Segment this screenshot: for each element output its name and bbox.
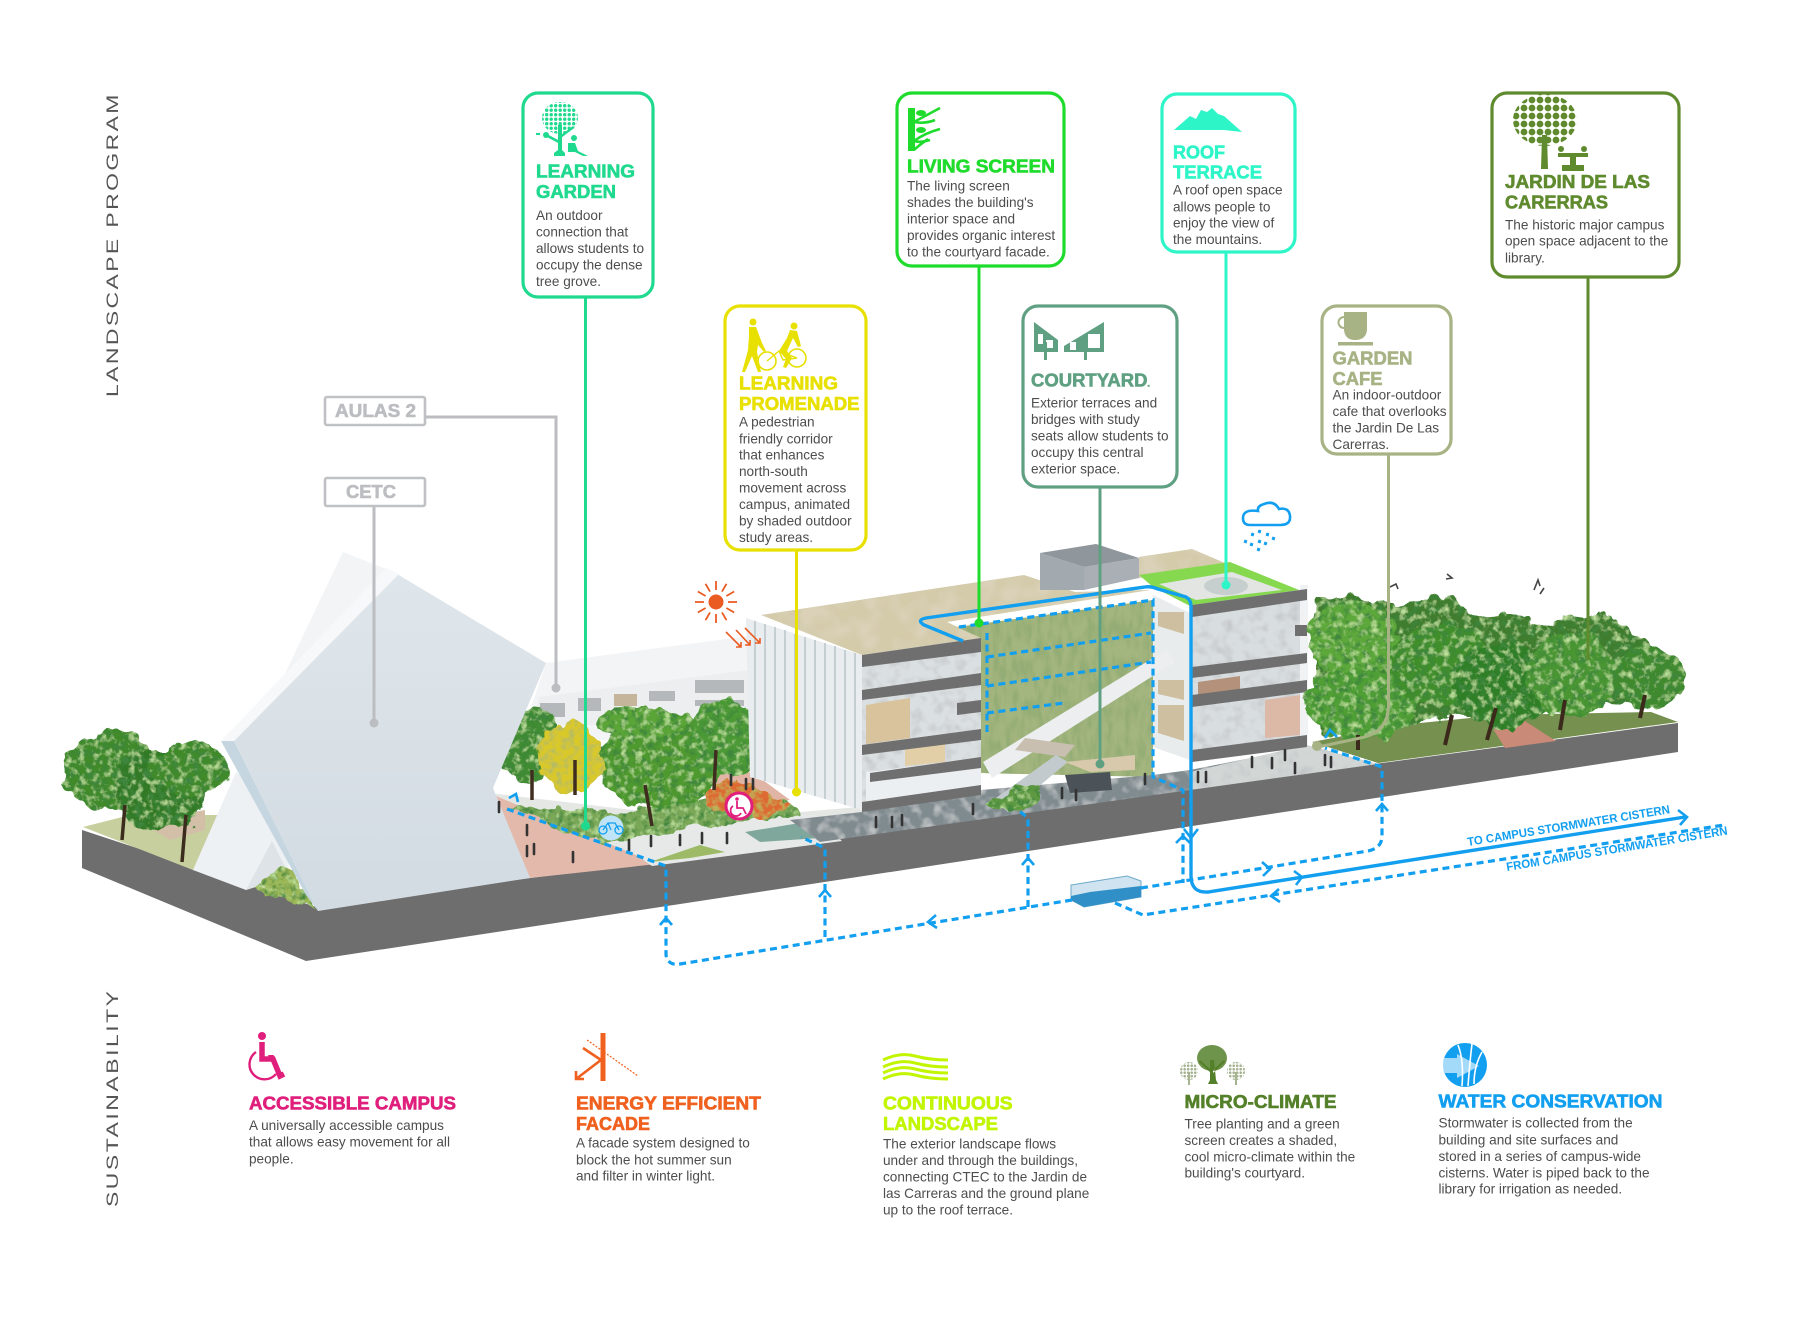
ground under building xyxy=(790,747,1320,842)
callout: learning garden: occupy the dense xyxy=(536,258,643,273)
cistern xyxy=(1071,876,1141,907)
plaza paving: rear xyxy=(700,772,790,802)
callout: learning promenade: that enhances xyxy=(739,448,825,463)
icon: sun rays arrows xyxy=(726,628,760,647)
site ground base xyxy=(489,763,1378,878)
tag: aulas 2: AULAS 2 xyxy=(335,401,416,421)
callout: learning promenade xyxy=(725,306,866,796)
site section diagram xyxy=(62,544,1684,961)
sustainability: energy efficient facade: A facade system designed to xyxy=(576,1136,750,1151)
callout: garden cafe: Carerras. xyxy=(1332,437,1389,452)
stair landing xyxy=(1015,738,1075,757)
sustainability: accessible campus xyxy=(249,1032,456,1166)
callout: roof terrace: TERRACE xyxy=(1173,163,1262,183)
courtyard north wing xyxy=(1153,595,1190,760)
courtyard planter xyxy=(989,787,1040,812)
sustainability: continuous landscape: CONTINUOUS xyxy=(883,1093,1013,1113)
callout: courtyard: Exterior terraces and xyxy=(1031,395,1157,410)
leader: aulas 2 xyxy=(425,417,560,692)
callout: courtyard: COURTYARD . xyxy=(1031,371,1150,391)
sustainability: micro-climate: building's courtyard. xyxy=(1184,1166,1305,1181)
roof left xyxy=(761,575,1150,655)
rain garden xyxy=(745,818,845,842)
roof back xyxy=(1139,549,1232,578)
east plaza xyxy=(1190,745,1378,790)
callout: living screen: LIVING SCREEN xyxy=(907,157,1055,177)
planting beds xyxy=(507,800,800,845)
living wall lines xyxy=(959,600,1183,883)
icon: courtyard terraces xyxy=(1034,322,1104,360)
callout: living screen: to the courtyard facade. xyxy=(907,245,1050,260)
sustainability: accessible campus: people. xyxy=(249,1151,294,1166)
callout: roof terrace xyxy=(1162,94,1295,590)
interior lower floor xyxy=(866,758,981,804)
irrigation main west xyxy=(507,809,1072,964)
callout: learning garden: connection that xyxy=(536,225,628,240)
section label: landscape program: LANDSCAPE PROGRAM xyxy=(104,95,122,397)
escalator xyxy=(993,755,1068,812)
background building: aulas 2 xyxy=(520,636,749,740)
callout: garden cafe: An indoor-outdoor xyxy=(1332,387,1442,402)
icon: tree and table xyxy=(1513,94,1588,171)
grand stair xyxy=(983,650,1175,778)
sustainability: water conservation: stored in a series of campus-wide xyxy=(1438,1149,1641,1164)
callout: roof terrace: ROOF xyxy=(1173,142,1225,162)
callout: roof terrace: enjoy the view of xyxy=(1173,216,1274,231)
callout: roof terrace: the mountains. xyxy=(1173,232,1262,247)
skylight drum xyxy=(1204,577,1248,595)
callout: learning promenade: north-south xyxy=(739,464,808,479)
callout: courtyard: bridges with study xyxy=(1031,412,1140,427)
facade fins xyxy=(755,621,855,808)
mechanical box xyxy=(1040,544,1139,590)
sustainability: water conservation: WATER CONSERVATION xyxy=(1438,1091,1662,1111)
ctec building xyxy=(193,552,546,911)
plate edge xyxy=(221,741,318,911)
sustainability: water conservation: building and site surfaces and xyxy=(1438,1132,1618,1147)
base slab xyxy=(82,723,1678,961)
right wing interior xyxy=(1192,589,1307,762)
icon: sun xyxy=(695,581,737,623)
callout: jardin de las carerras: library. xyxy=(1505,250,1545,265)
icon: vine screen xyxy=(908,108,940,151)
sustainability: continuous landscape: up to the roof terrace. xyxy=(883,1202,1013,1217)
sustainability: energy efficient facade: ENERGY EFFICIENT xyxy=(576,1093,761,1113)
sustainability: continuous landscape: las Carreras and the ground plane xyxy=(883,1186,1089,1201)
sustainability: micro-climate: screen creates a shaded, xyxy=(1184,1133,1337,1148)
undercroft xyxy=(1065,772,1112,793)
marker: bicycle xyxy=(598,816,624,840)
icon: waves xyxy=(883,1055,948,1079)
callout: jardin de las carerras xyxy=(1492,93,1679,660)
trees: left group xyxy=(62,734,228,832)
callout: living screen: provides organic interest xyxy=(907,228,1055,243)
callout: learning garden: allows students to xyxy=(536,241,644,256)
dashed arrowheads xyxy=(509,730,1388,928)
callout: learning promenade: A pedestrian xyxy=(739,415,815,430)
callout: courtyard: seats allow students to xyxy=(1031,428,1169,443)
sustainability: water conservation: cisterns. Water is piped back to the xyxy=(1438,1165,1650,1180)
callout: jardin de las carerras: CARERRAS xyxy=(1505,193,1608,213)
icon: tree and reader xyxy=(536,102,588,156)
left wing interior xyxy=(862,638,981,812)
callout: living screen: interior space and xyxy=(907,212,1015,227)
callout: living screen xyxy=(897,93,1064,628)
label: to campus cistern: TO CAMPUS STORMWATER CISTERN xyxy=(1466,802,1671,849)
sustainability: water conservation: library for irrigation as needed. xyxy=(1438,1182,1622,1197)
sustainability: continuous landscape xyxy=(883,1055,1089,1217)
leader: ctec xyxy=(370,506,378,728)
callout: roof terrace: A roof open space xyxy=(1173,183,1283,198)
callout: living screen: shades the building's xyxy=(907,195,1034,210)
callout: courtyard xyxy=(1023,306,1177,768)
yellow tree xyxy=(538,721,602,793)
callout: learning promenade: campus, animated xyxy=(739,497,850,512)
interior wood xyxy=(905,744,945,766)
callout: learning promenade: movement across xyxy=(739,481,846,496)
callout: learning garden: LEARNING xyxy=(536,162,635,182)
floor slabs xyxy=(862,589,1307,812)
sustainability: energy efficient facade: FACADE xyxy=(576,1114,650,1134)
paved walk xyxy=(612,815,842,866)
tree trunks: left group xyxy=(122,805,186,862)
birds xyxy=(1390,574,1544,594)
label: from campus cistern: FROM CAMPUS STORMWATER CISTERN xyxy=(1505,824,1728,874)
trees: east grove xyxy=(1302,596,1684,763)
callout: jardin de las carerras: JARDIN DE LAS xyxy=(1505,172,1650,192)
callout: roof terrace: allows people to xyxy=(1173,199,1270,214)
roof drain line xyxy=(920,587,1685,892)
callout: garden cafe: cafe that overlooks xyxy=(1332,404,1447,419)
sustainability: water conservation: Stormwater is collected from the xyxy=(1438,1116,1633,1131)
callout: garden cafe xyxy=(1312,306,1451,751)
tag: aulas 2 xyxy=(325,397,425,425)
rear plate xyxy=(250,552,399,741)
icon: walker and cyclist xyxy=(742,318,806,372)
tag: cetc: CETC xyxy=(346,482,396,502)
callout: jardin de las carerras: The historic major campus xyxy=(1505,217,1665,232)
branches xyxy=(801,748,1382,937)
callout: courtyard: exterior space. xyxy=(1031,461,1120,476)
east post xyxy=(1300,585,1308,750)
plate top edge xyxy=(221,568,399,741)
left grounds xyxy=(83,815,245,880)
return line xyxy=(1115,825,1724,915)
callout: learning promenade: LEARNING xyxy=(739,373,838,393)
interior pink wall xyxy=(1265,695,1300,738)
plaza paving xyxy=(489,793,657,878)
sustainability: continuous landscape: LANDSCAPE xyxy=(883,1114,998,1134)
people xyxy=(499,750,1331,862)
callout: living screen: The living screen xyxy=(907,179,1010,194)
green roof xyxy=(1139,562,1299,606)
icon: water disc xyxy=(1443,1043,1487,1087)
roof terrace paving xyxy=(1159,572,1282,600)
main building xyxy=(746,544,1378,842)
callout: garden cafe: CAFE xyxy=(1332,369,1382,389)
icon: sun screen xyxy=(576,1033,638,1081)
callout: garden cafe: GARDEN xyxy=(1332,348,1412,368)
sustainability: energy efficient facade xyxy=(576,1033,761,1184)
callout: learning promenade: by shaded outdoor xyxy=(739,514,852,529)
callout: jardin de las carerras: open space adjacent to the xyxy=(1505,234,1668,249)
courtyard wing windows xyxy=(1158,612,1184,741)
living wall xyxy=(957,600,1153,777)
solid arrowheads xyxy=(1184,810,1687,885)
interior tan wall xyxy=(866,698,910,744)
sustainability: micro-climate: MICRO-CLIMATE xyxy=(1184,1092,1336,1112)
section label: sustainability: SUSTAINABILITY xyxy=(104,990,122,1207)
sustainability: continuous landscape: The exterior landscape flows xyxy=(883,1136,1056,1151)
callout: learning garden xyxy=(523,93,653,830)
flower bed xyxy=(700,782,792,820)
mezzanine deck xyxy=(1065,755,1135,772)
tag: cetc xyxy=(325,478,425,506)
sustainability: continuous landscape: connecting CTEC to the Jardin de xyxy=(883,1169,1087,1184)
callout: learning garden: An outdoor xyxy=(536,208,603,223)
marker: wheelchair xyxy=(726,793,752,819)
sustainability: micro-climate: cool micro-climate within the xyxy=(1184,1149,1355,1164)
stormwater system xyxy=(507,587,1728,964)
icon: wheelchair xyxy=(250,1032,284,1079)
callout: learning garden: tree grove. xyxy=(536,274,601,289)
sustainability: continuous landscape: under and through the buildings, xyxy=(883,1153,1078,1168)
icon: rain cloud xyxy=(1243,503,1290,551)
interior rust wall xyxy=(1198,676,1240,698)
icon: coffee cup xyxy=(1338,312,1373,346)
sustainability: micro-climate xyxy=(1180,1045,1355,1181)
sustainability: energy efficient facade: and filter in winter light. xyxy=(576,1169,715,1184)
trees: central garden xyxy=(500,702,765,826)
callout: courtyard: occupy this central xyxy=(1031,445,1144,460)
front plate xyxy=(234,574,546,911)
left grounds path xyxy=(140,810,205,840)
callout: learning garden: GARDEN xyxy=(536,182,616,202)
callout: learning promenade: friendly corridor xyxy=(739,431,833,446)
icon: mountains xyxy=(1174,108,1242,132)
sustainability: accessible campus: ACCESSIBLE CAMPUS xyxy=(249,1093,456,1113)
rear lower plate xyxy=(193,772,290,890)
callout: garden cafe: the Jardin De Las xyxy=(1332,420,1439,435)
icon: trees xyxy=(1180,1045,1245,1085)
rear plate grass xyxy=(251,869,315,911)
sustainability: accessible campus: that allows easy movement for all xyxy=(249,1135,450,1150)
sustainability: accessible campus: A universally accessible campus xyxy=(249,1118,444,1133)
sustainability: micro-climate: Tree planting and a green xyxy=(1184,1116,1340,1131)
rear plate shadow xyxy=(246,841,290,890)
sustainability: water conservation xyxy=(1438,1043,1662,1197)
west facade xyxy=(746,618,862,810)
callout: learning promenade: PROMENADE xyxy=(739,394,860,414)
callout: learning promenade: study areas. xyxy=(739,530,813,545)
planting strip xyxy=(650,845,725,862)
sustainability: energy efficient facade: block the hot summer sun xyxy=(576,1152,732,1167)
